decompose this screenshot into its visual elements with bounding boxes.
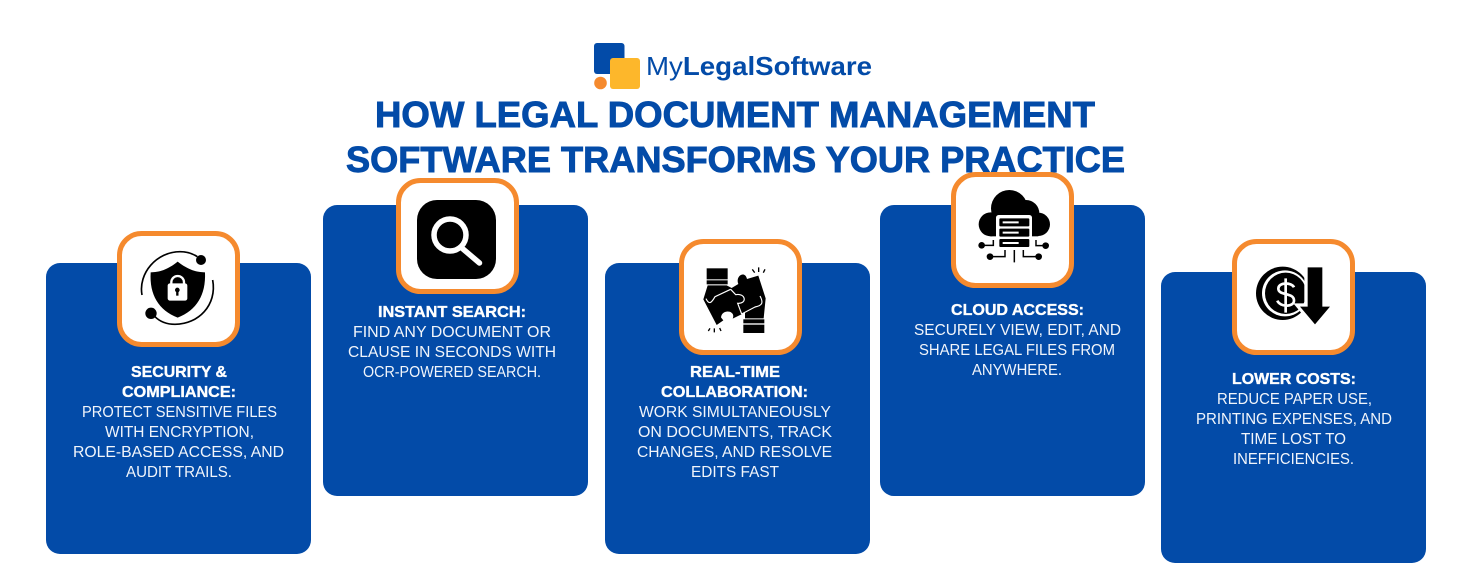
panel: real-time collaboration xyxy=(605,242,870,554)
text: real-time collaboration: WORK SIMULTANEOUSLY xyxy=(639,404,831,421)
text: security and compliance: PROTECT SENSITIVE FILES xyxy=(82,404,277,421)
text: security and compliance: COMPLIANCE: xyxy=(122,384,236,401)
text: cloud access: ANYWHERE. xyxy=(972,362,1062,379)
title xyxy=(346,94,1125,180)
text: cloud access: SHARE LEGAL FILES FROM xyxy=(919,342,1115,359)
panel: lower costs xyxy=(1161,242,1426,563)
title: HOW LEGAL DOCUMENT MANAGEMENT xyxy=(375,94,1095,135)
logo wordmark: MyLegalSoftware xyxy=(646,51,872,81)
text: security and compliance xyxy=(73,364,284,481)
text: lower costs: TIME LOST TO xyxy=(1241,431,1346,448)
panel: security and compliance xyxy=(46,234,311,554)
icon box: puzzle hands xyxy=(682,242,800,352)
text: instant search xyxy=(348,304,556,381)
text: real-time collaboration: CHANGES, AND RESOLVE xyxy=(637,444,832,461)
icon box: dollar with down arrow xyxy=(1234,242,1352,352)
text: lower costs: REDUCE PAPER USE, xyxy=(1217,391,1372,408)
text: real-time collaboration: COLLABORATION: xyxy=(661,384,808,401)
text: instant search: FIND ANY DOCUMENT OR xyxy=(353,324,551,341)
text: instant search: OCR-POWERED SEARCH. xyxy=(363,364,541,381)
text: cloud access: SECURELY VIEW, EDIT, AND xyxy=(914,322,1121,339)
text: security and compliance: ROLE-BASED ACCESS, AND xyxy=(73,444,284,461)
text: cloud access xyxy=(914,302,1121,379)
icon box: shield with lock xyxy=(120,234,238,344)
logo xyxy=(594,43,872,89)
icon box: cloud server xyxy=(954,174,1072,286)
panel: cloud access xyxy=(880,174,1145,496)
panel: instant search xyxy=(323,180,588,496)
text: lower costs: PRINTING EXPENSES, AND xyxy=(1196,411,1392,428)
text: lower costs: LOWER COSTS: xyxy=(1232,371,1356,388)
icon box: magnifying glass xyxy=(398,180,516,292)
logo mark xyxy=(594,43,640,89)
text: security and compliance: AUDIT TRAILS. xyxy=(126,464,232,481)
text: real-time collaboration xyxy=(637,364,833,481)
text: security and compliance: SECURITY & xyxy=(131,364,227,381)
text: instant search: CLAUSE IN SECONDS WITH xyxy=(348,344,556,361)
text: real-time collaboration: EDITS FAST xyxy=(691,464,780,481)
text: lower costs xyxy=(1196,371,1392,468)
text: lower costs: INEFFICIENCIES. xyxy=(1233,451,1354,468)
text: cloud access: CLOUD ACCESS: xyxy=(951,302,1084,319)
text: instant search: INSTANT SEARCH: xyxy=(378,304,526,321)
text: real-time collaboration: ON DOCUMENTS, TRACK xyxy=(638,424,833,441)
title: SOFTWARE TRANSFORMS YOUR PRACTICE xyxy=(346,139,1125,180)
text: security and compliance: WITH ENCRYPTION, xyxy=(105,424,254,441)
text: real-time collaboration: REAL-TIME xyxy=(690,364,780,381)
